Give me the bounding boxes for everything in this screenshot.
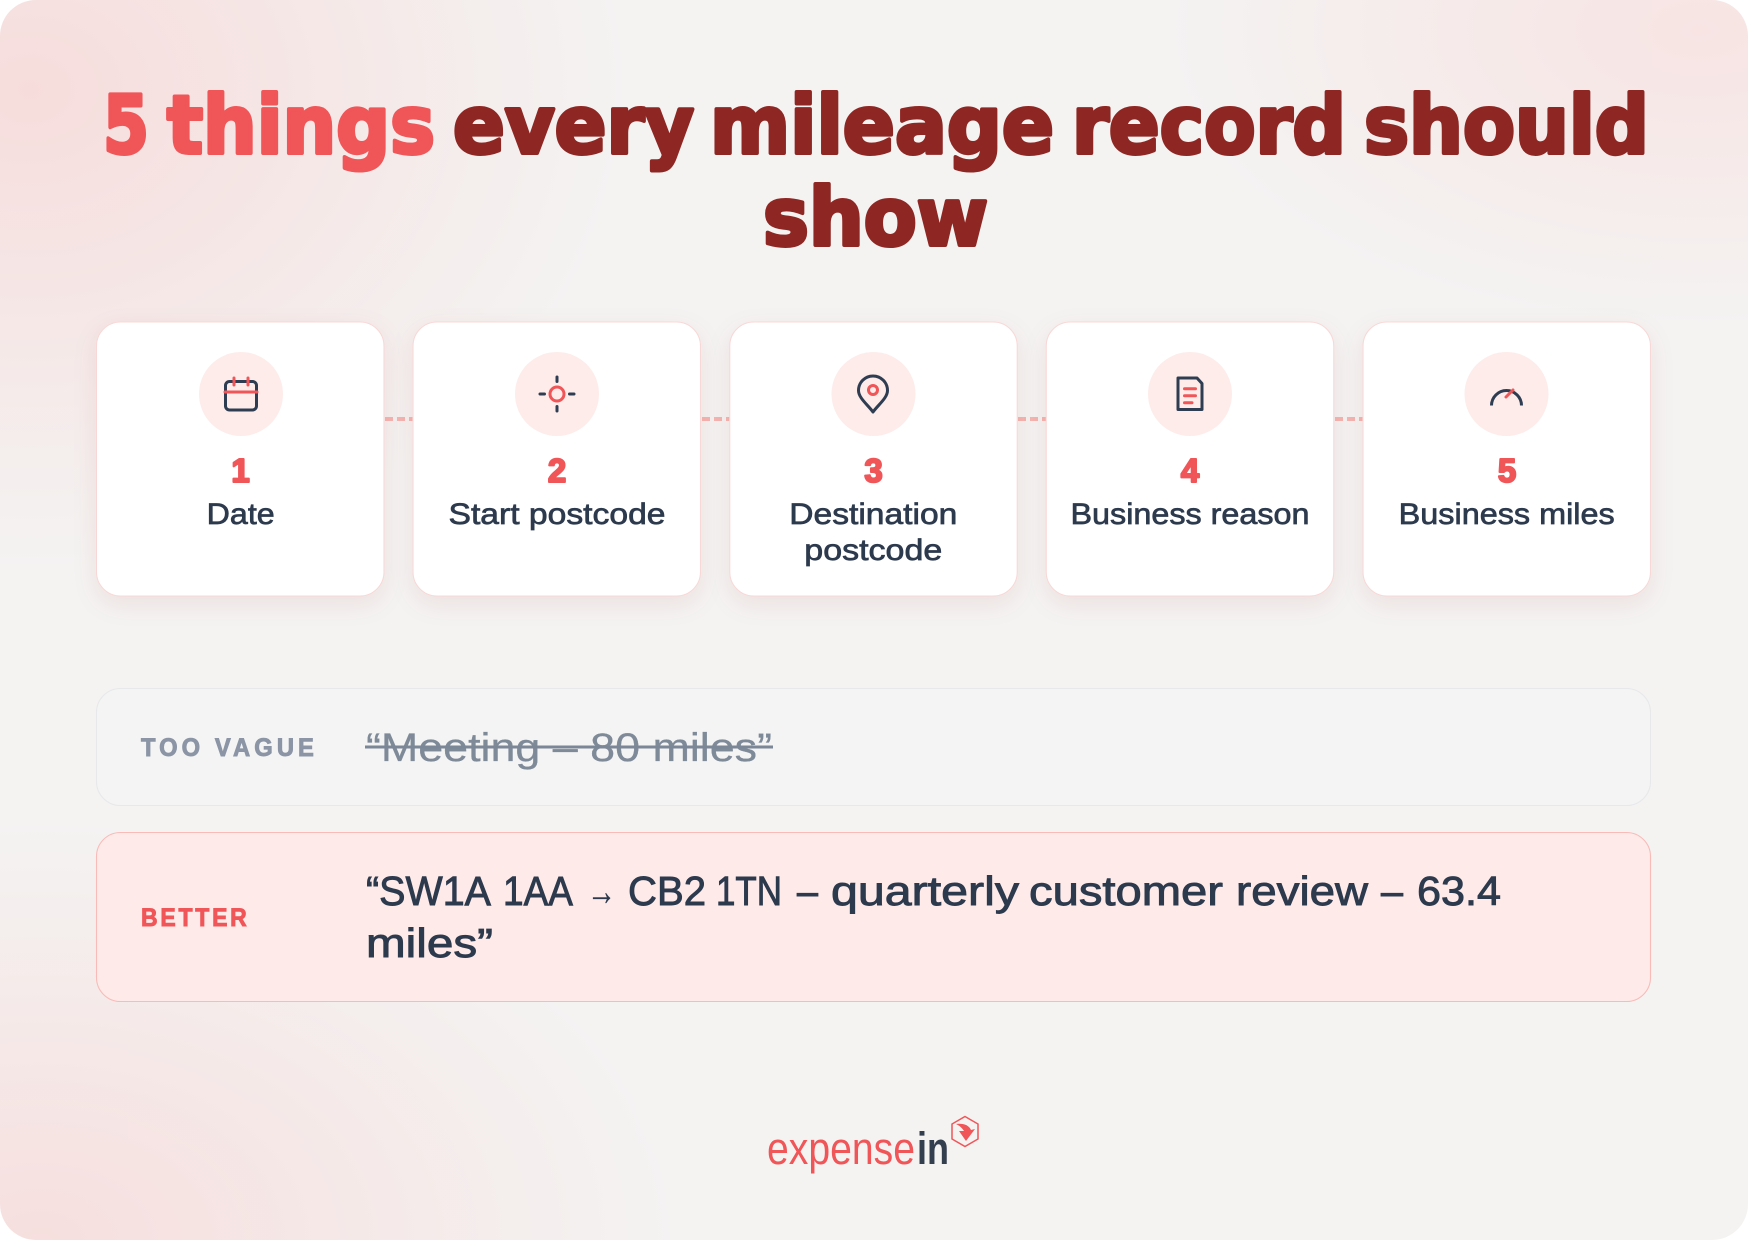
title: 5 xyxy=(103,79,149,172)
card 2: start postcode xyxy=(413,322,700,596)
icon: target xyxy=(515,352,599,436)
logo: expensein: in xyxy=(917,1123,949,1174)
card 5: business miles xyxy=(1363,322,1650,596)
icon: hexagon arrow xyxy=(952,1116,978,1146)
better example text xyxy=(366,868,1501,966)
icon: document xyxy=(1148,352,1232,436)
icon: map pin xyxy=(832,352,916,436)
icon: calendar xyxy=(199,352,283,436)
label: destination postcode: Destination xyxy=(789,498,957,531)
label: date: Date xyxy=(207,498,275,531)
better example text: miles” xyxy=(366,920,493,966)
better example text: 1TN xyxy=(716,868,782,914)
logo: expensein: expense xyxy=(767,1123,915,1174)
connector 2 xyxy=(702,417,730,421)
number 5: 5 xyxy=(1498,452,1516,489)
better example text: review xyxy=(1236,868,1368,914)
better example text: 1AA xyxy=(503,868,574,914)
better example text: quarterly xyxy=(831,868,1020,914)
better example text: – xyxy=(797,868,818,914)
panel: better xyxy=(96,832,1650,1002)
number 3: 3 xyxy=(864,452,883,489)
panel: too vague xyxy=(96,688,1650,806)
title: things xyxy=(167,79,435,172)
card 4: business reason xyxy=(1046,322,1334,596)
better example text: CB2 xyxy=(628,868,706,914)
card 1: date xyxy=(96,322,384,596)
better example text: customer xyxy=(1029,868,1223,914)
better example text: “SW1A xyxy=(366,868,492,914)
title: every xyxy=(453,79,694,172)
better example text: – xyxy=(1381,868,1403,914)
connector 3 xyxy=(1018,417,1046,421)
title: should xyxy=(1364,79,1649,172)
label: business miles: Business miles xyxy=(1399,498,1615,531)
better example text: → xyxy=(587,868,616,914)
title: record xyxy=(1072,79,1346,172)
label: destination postcode: postcode xyxy=(804,534,942,567)
title xyxy=(103,79,1649,264)
card 3: destination postcode xyxy=(730,322,1017,596)
number 4: 4 xyxy=(1181,452,1200,489)
connector 4 xyxy=(1335,417,1363,421)
title: show xyxy=(763,171,988,264)
icon: gauge xyxy=(1464,352,1548,436)
title: mileage xyxy=(710,79,1054,172)
label: business reason: Business reason xyxy=(1070,498,1310,531)
label: start postcode: Start postcode xyxy=(448,498,666,531)
label: too vague: TOO VAGUE xyxy=(141,734,314,762)
number 1: 1 xyxy=(231,452,250,489)
better example text: 63.4 xyxy=(1417,868,1501,914)
number 2: 2 xyxy=(548,452,566,489)
connector 1 xyxy=(385,417,413,421)
label: better: BETTER xyxy=(141,904,247,932)
label: destination postcode xyxy=(789,498,957,567)
struck-through example: “Meeting – 80 miles” xyxy=(366,726,772,770)
